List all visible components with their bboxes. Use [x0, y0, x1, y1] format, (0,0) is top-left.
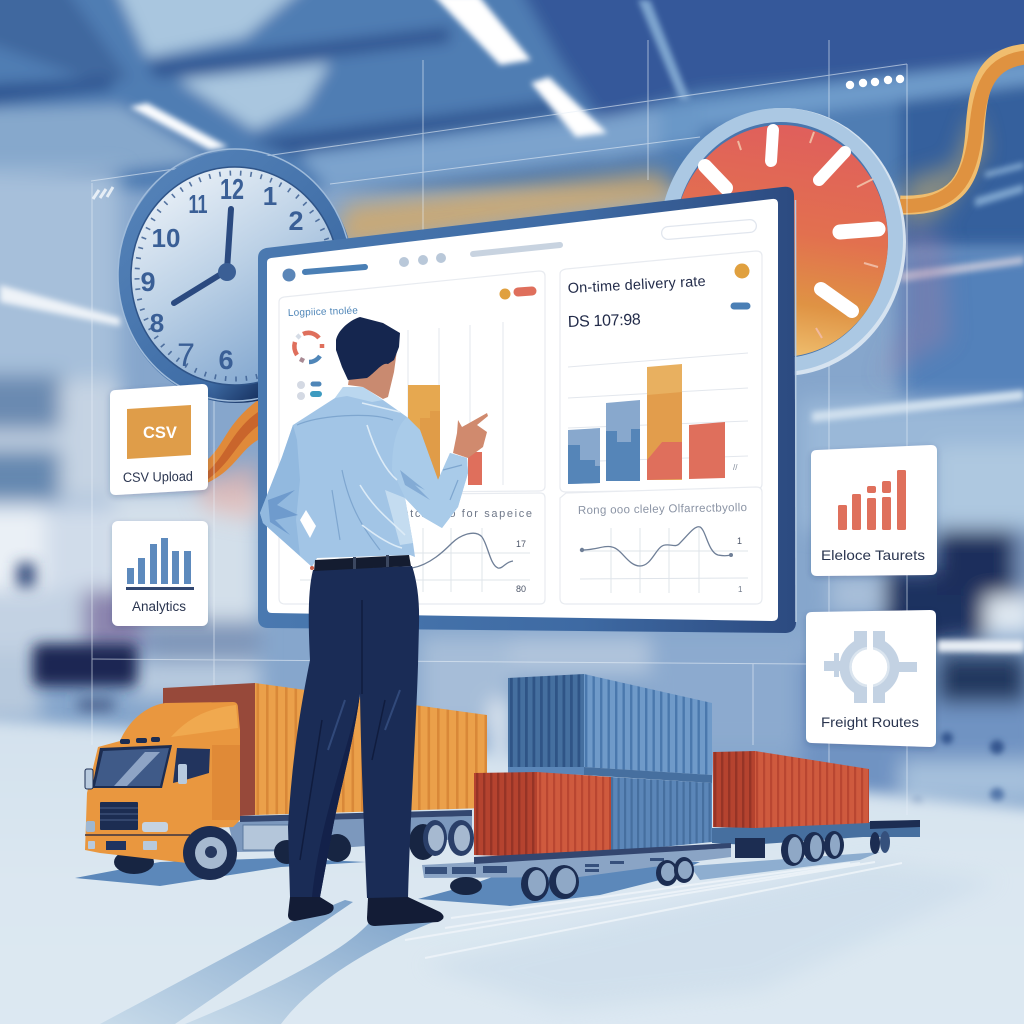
panel: on-time delivery rate: On-time delivery rate: [567, 274, 706, 297]
panel: right line chart: 1: [737, 536, 742, 546]
card: analytics: [112, 521, 208, 626]
panel: left line chart: [279, 493, 545, 604]
shirt shading: [260, 387, 468, 556]
panel: right line chart: [560, 487, 762, 604]
bar chart: //: [733, 463, 738, 472]
screen frame: [258, 187, 796, 633]
container: front red: [474, 772, 611, 857]
truck: orange rig: [85, 683, 487, 880]
clock numerals: 2: [288, 206, 304, 236]
clock numerals: 12: [220, 174, 244, 206]
panel: on-time delivery rate: DS 107:98: [568, 311, 641, 331]
hair: [336, 317, 400, 380]
ceiling: [0, 0, 1024, 250]
panel: logistics tools: [279, 271, 545, 493]
cargo container: [163, 683, 255, 816]
floor: [0, 718, 1024, 1024]
clock numerals: 7: [177, 337, 195, 373]
container: right red: [713, 751, 869, 828]
clock numerals: 6: [218, 345, 234, 375]
panel: on-time delivery rate: [560, 251, 762, 492]
panel: right line chart: Rong ooo cleley Olfarrectbyollo: [578, 502, 747, 517]
ribbon: left swoosh: [207, 400, 258, 483]
clock numerals: [140, 174, 304, 375]
shoes: [288, 897, 334, 921]
bar chart: [408, 385, 482, 485]
card: freight routes: [806, 610, 936, 747]
front wheel: [183, 826, 237, 880]
belt: [314, 555, 411, 571]
panel: right line chart: 1: [738, 585, 743, 594]
containers and trailers: [422, 674, 920, 901]
bar chart: [568, 364, 738, 484]
card: speed bars: [811, 445, 937, 576]
floor shadows and road streaks: [75, 852, 1000, 1024]
clock hands: [174, 209, 231, 303]
panel: left line chart: 17: [516, 539, 526, 549]
card: CSV upload: CSV: [143, 424, 177, 442]
clock numerals: 11: [188, 189, 208, 219]
hand: [453, 413, 488, 458]
clock numerals: 8: [150, 308, 164, 338]
grid lines: [408, 322, 503, 485]
warm glow behind screen: [195, 110, 985, 520]
container: top blue: [508, 674, 712, 783]
card: speed bars: Eleloce Taurets: [821, 547, 925, 563]
card: freight routes: Freight Routes: [821, 714, 919, 730]
clock ticks: [137, 173, 333, 379]
rear trailer: [712, 820, 920, 866]
icon: wall clock: [118, 149, 354, 403]
hatch marks: [93, 187, 113, 199]
card: analytics: Analytics: [132, 599, 186, 614]
top bar: [282, 226, 750, 282]
clock numerals: 10: [152, 223, 180, 253]
legend: [297, 381, 319, 400]
shirt: [260, 387, 468, 567]
panel: logistics tools: Logpiice tnolée: [288, 306, 358, 319]
card: CSV upload: [110, 384, 208, 495]
neck and face: [348, 345, 397, 399]
clock numerals: 9: [140, 267, 156, 297]
container: lower blue: [611, 777, 712, 852]
wheels: [274, 840, 300, 864]
panel: left line chart: 80: [516, 584, 526, 594]
panel: left line chart: stcx bbo for sapeice: [403, 508, 532, 520]
cab: [85, 702, 240, 863]
ribbon: top right: [900, 53, 1024, 206]
man viewing dashboard: [260, 317, 488, 926]
clock numerals: 1: [263, 181, 277, 211]
dots: top right: [846, 75, 904, 89]
donut chart: [294, 333, 322, 362]
card: CSV upload: CSV Upload: [123, 469, 193, 485]
front trailer: [422, 843, 731, 901]
mid room: [0, 170, 1024, 800]
icon: gauge: [659, 108, 906, 376]
dashboard screen: [258, 187, 796, 633]
chassis: [228, 816, 472, 852]
glass frame lines: [91, 40, 907, 815]
grille: [100, 802, 138, 830]
pants: [288, 566, 419, 898]
